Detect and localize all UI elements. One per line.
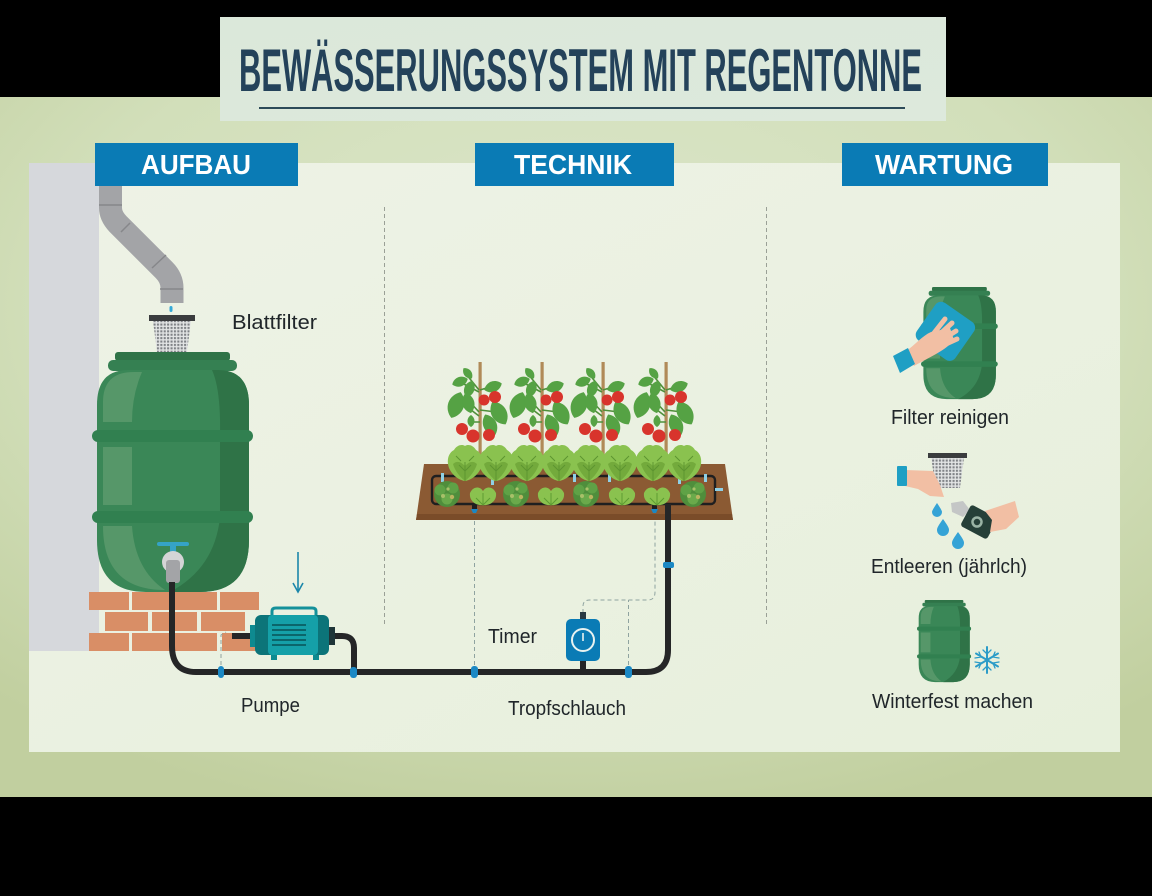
drip hose loop bbox=[432, 476, 715, 504]
dashed sensor lines bbox=[221, 510, 655, 672]
label: Blattfilter: Blattfilter bbox=[232, 312, 317, 334]
maintenance: winterfest bbox=[917, 600, 999, 682]
heading: Technik bbox=[475, 143, 674, 186]
filter basket bbox=[931, 458, 964, 488]
icon: snowflake bbox=[975, 647, 999, 673]
label: Tropfschlauch: Tropfschlauch bbox=[508, 698, 626, 720]
timer bbox=[566, 612, 600, 672]
raised bed bbox=[416, 464, 733, 521]
label: Pumpe: Pumpe bbox=[241, 695, 300, 717]
heading: Wartung: WARTUNG bbox=[875, 149, 1013, 180]
title block bbox=[220, 17, 946, 121]
lettuce row back bbox=[448, 445, 701, 481]
rain barrel bbox=[92, 352, 253, 592]
right hand bbox=[985, 501, 1019, 532]
main panel bbox=[29, 163, 1120, 752]
water drops bbox=[932, 503, 964, 549]
cloth bbox=[913, 299, 978, 364]
left hand bbox=[905, 470, 944, 497]
heading: Wartung bbox=[842, 143, 1048, 186]
background band bbox=[0, 97, 1152, 797]
heading: Aufbau bbox=[95, 143, 298, 186]
bricks bbox=[89, 592, 259, 651]
house wall bbox=[29, 163, 99, 651]
heading: Technik: TECHNIK bbox=[514, 149, 632, 180]
wrench bbox=[951, 501, 970, 517]
icon: water drop above filter bbox=[170, 306, 172, 312]
label: Filter reinigen: Filter reinigen bbox=[891, 407, 1009, 429]
tap bbox=[157, 542, 189, 583]
maintenance: entleeren bbox=[897, 453, 1019, 549]
hose network bbox=[172, 520, 668, 672]
downpipe bbox=[99, 186, 183, 303]
heading: Aufbau: AUFBAU bbox=[141, 149, 251, 180]
label: Winterfest machen: Winterfest machen bbox=[872, 691, 1033, 713]
hose connectors bbox=[218, 562, 674, 678]
leaf filter bbox=[149, 315, 195, 352]
label: Timer: Timer bbox=[488, 626, 537, 648]
tomato plants bbox=[444, 362, 698, 456]
label: Entleeren (jährlich): Entleeren (jährlch) bbox=[871, 556, 1027, 578]
drip emitters bbox=[441, 473, 723, 491]
seedlings front row bbox=[434, 481, 706, 507]
hand bbox=[905, 319, 957, 366]
device bbox=[960, 504, 998, 540]
arrow to pump bbox=[293, 552, 303, 592]
maintenance: filter reinigen bbox=[893, 287, 998, 399]
pump bbox=[250, 608, 335, 660]
